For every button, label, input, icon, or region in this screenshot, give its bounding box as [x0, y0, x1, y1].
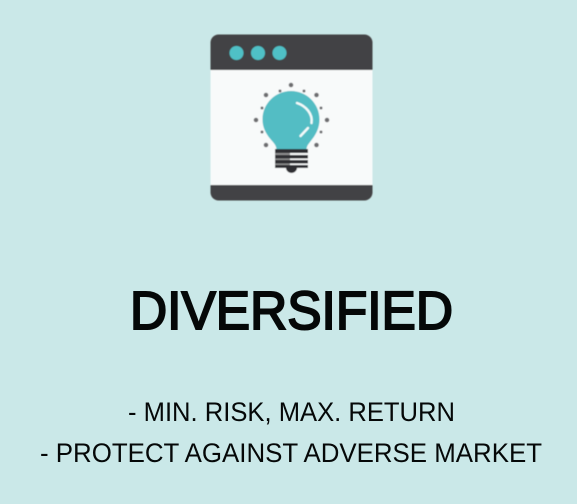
icon: browser window with light bulb	[210, 34, 373, 201]
bulb rays	[254, 83, 329, 147]
icon: bulb	[262, 91, 320, 173]
infographic	[41, 34, 542, 462]
window body	[210, 34, 373, 201]
bullet: protect: - PROTECT AGAINST ADVERSE MARKET	[40, 438, 542, 468]
window dots	[230, 46, 286, 60]
title: DIVERSIFIED	[130, 281, 453, 341]
bullet: min risk: - MIN. RISK, MAX. RETURN	[128, 397, 455, 427]
